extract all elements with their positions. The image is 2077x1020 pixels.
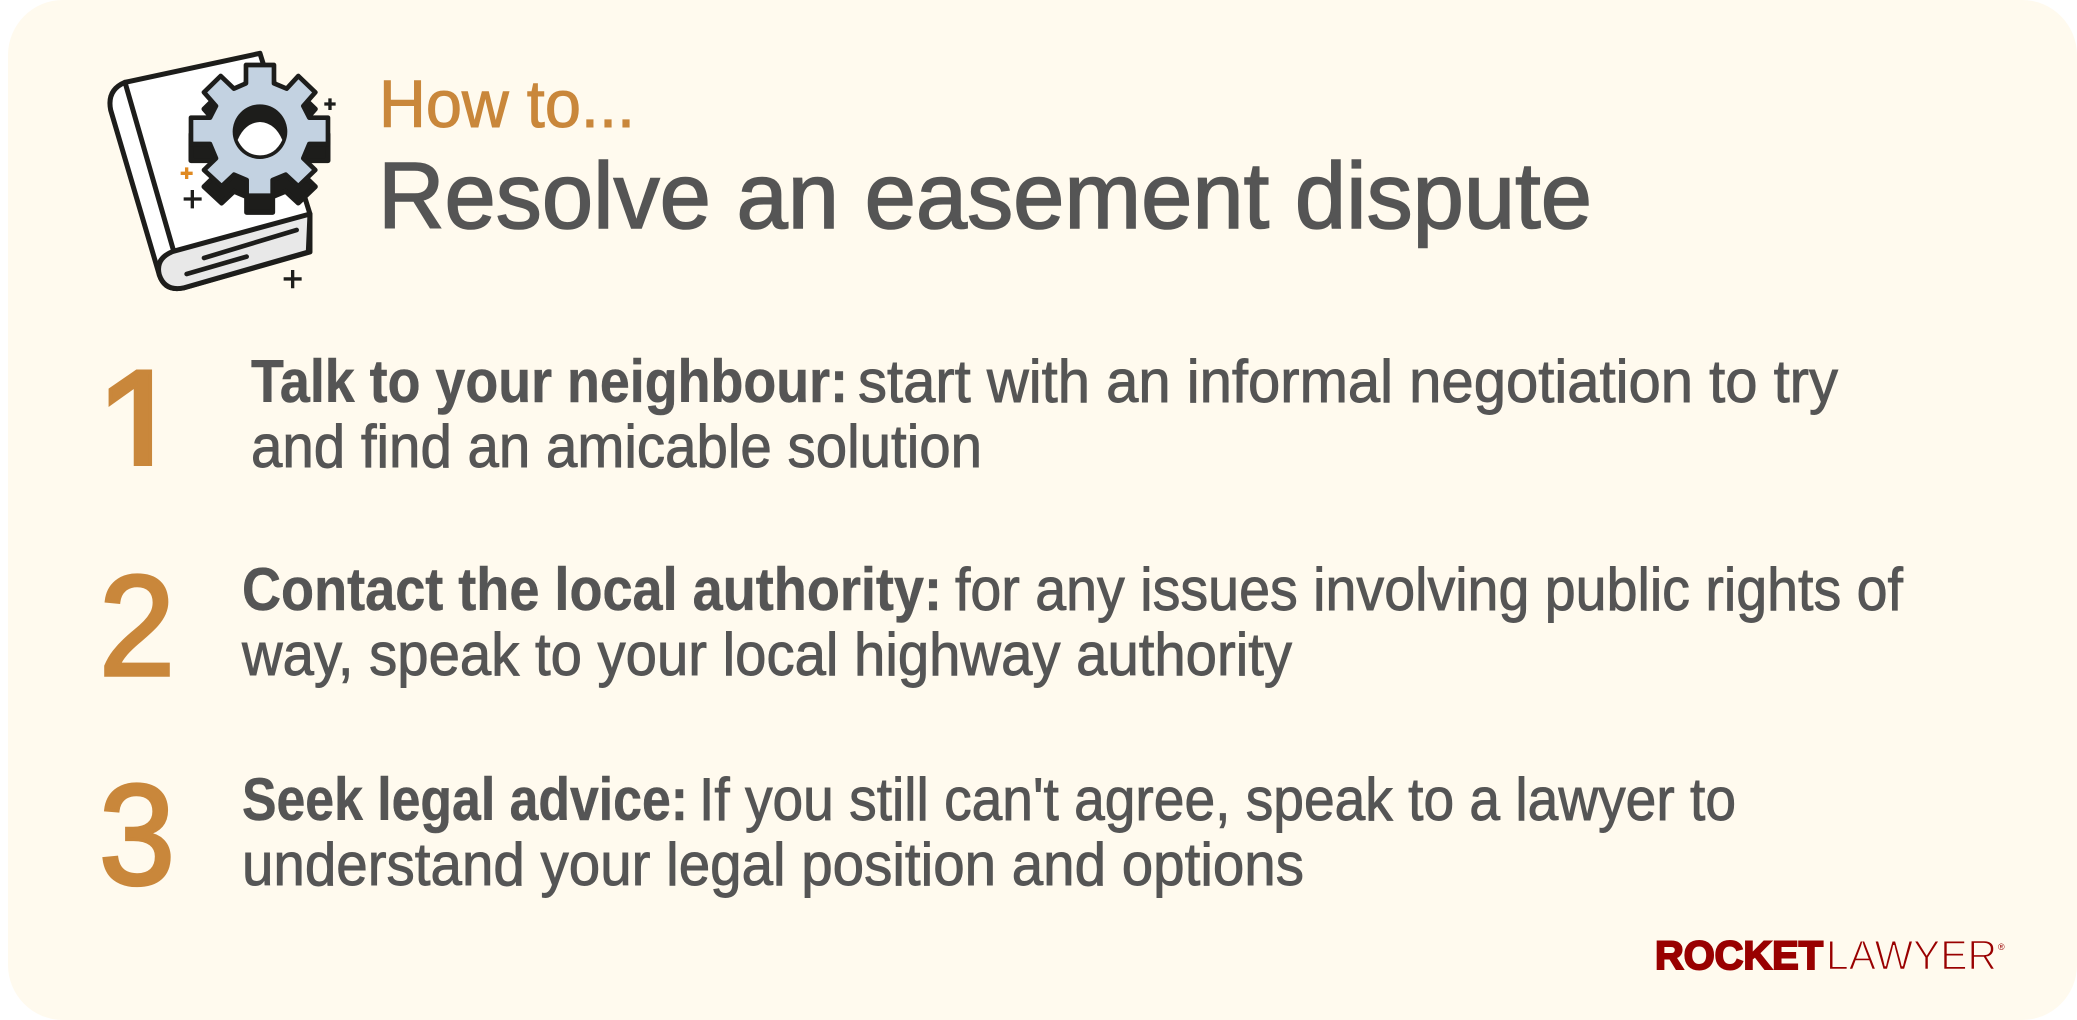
step 3 text [242, 766, 1736, 898]
logo: Rocket Lawyer [1655, 932, 2005, 978]
icon: book with gear [110, 53, 336, 289]
step 3 text: Seek legal advice: [242, 766, 688, 833]
step 1 text: start with an informal negotiation to try [858, 348, 1838, 415]
title: Resolve an easement dispute [378, 143, 1592, 248]
step 1 text: Talk to your neighbour: [251, 348, 848, 415]
step 2 text [241, 556, 1903, 688]
step 1 text: and find an amicable solution [251, 413, 982, 480]
heading: How to...: How to... [379, 67, 635, 142]
step 3 text: understand your legal position and options [242, 831, 1304, 898]
step 2 text: Contact the local authority: [242, 556, 942, 623]
logo: Rocket Lawyer: ROCKET [1655, 934, 1823, 978]
logo: Rocket Lawyer: LAWYER [1826, 932, 1997, 978]
step 1 text [251, 348, 1838, 480]
step 3 number: 3 [99, 756, 175, 915]
logo: Rocket Lawyer: ® [1998, 942, 2005, 952]
step 3 text: If you still can't agree, speak to a lawyer to [699, 766, 1736, 833]
step 1 number: 1 [95, 337, 185, 518]
step 2 number: 2 [99, 547, 175, 706]
step 2 text: way, speak to your local highway authority [241, 621, 1292, 688]
step 2 text: for any issues involving public rights of [955, 556, 1903, 623]
